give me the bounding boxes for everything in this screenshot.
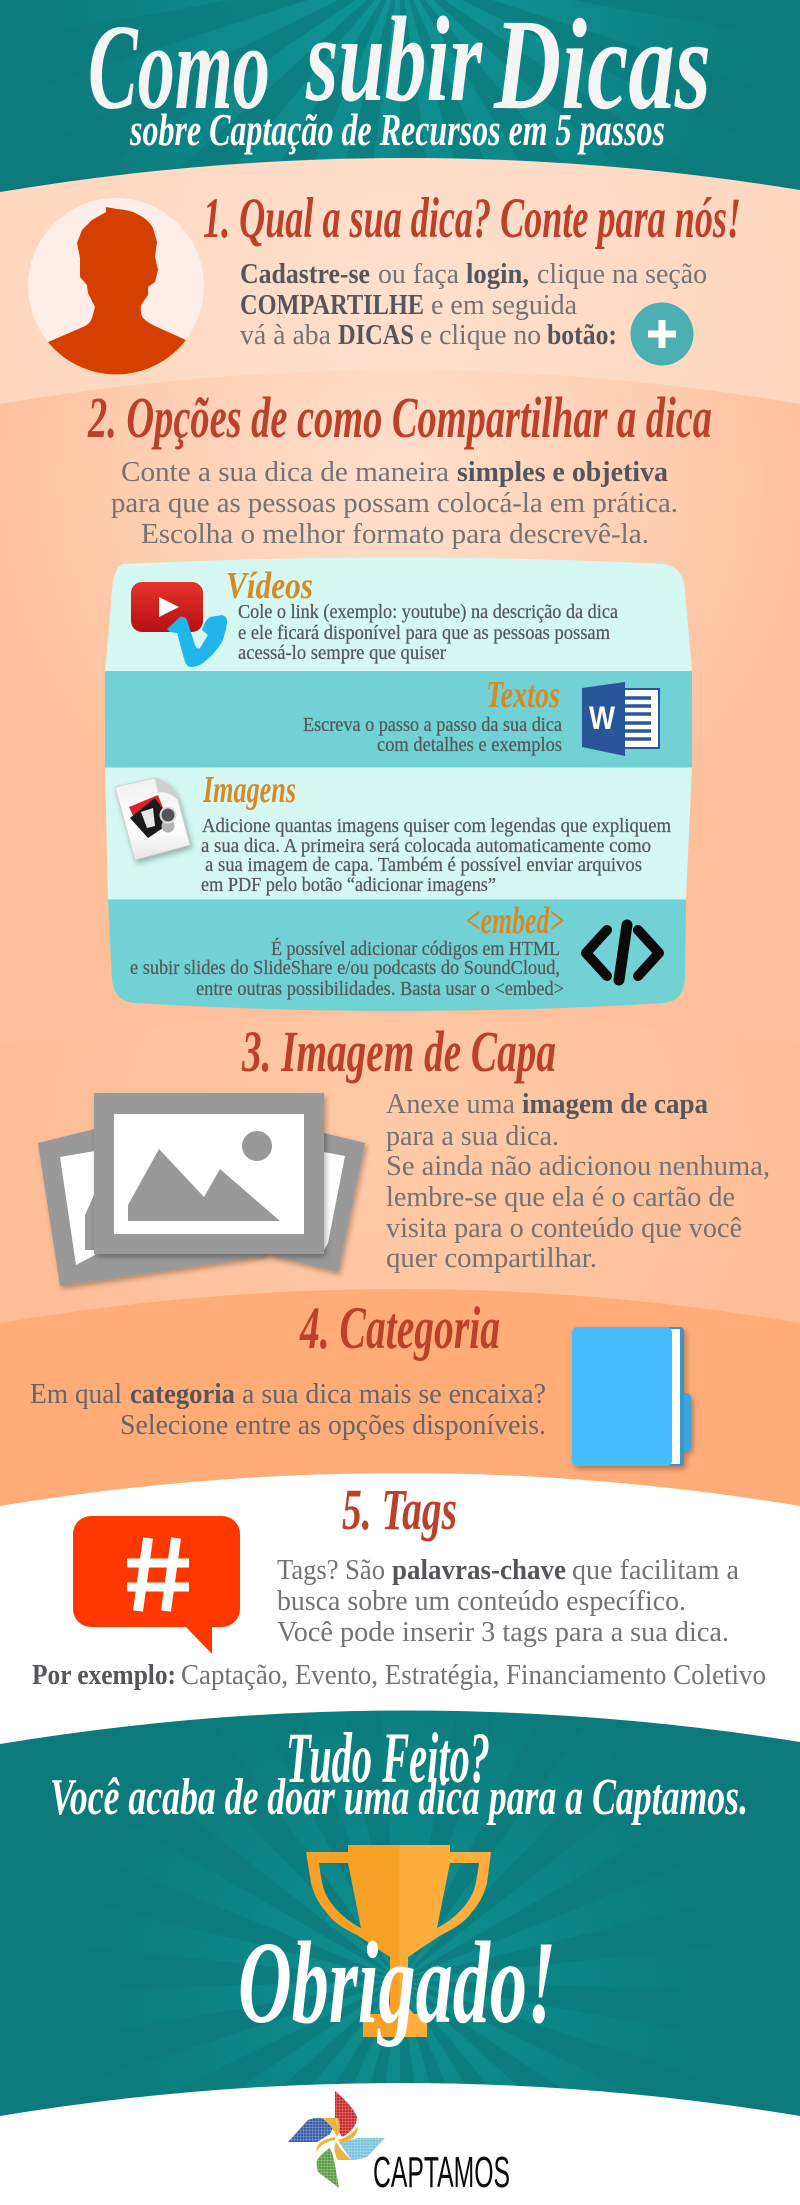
heading: tudo feito: Tudo Feito? <box>286 1718 490 1798</box>
panel: step 1 <box>0 158 800 420</box>
text block: step 4: Selecione entre as opções disponíveis. <box>120 1410 546 1441</box>
panel: format options card <box>100 550 700 1020</box>
icon: person avatar <box>28 198 204 374</box>
icon: trophy <box>306 1845 491 2037</box>
text block: step 1 instructions: botão: <box>547 320 617 351</box>
icon: word document <box>582 682 659 756</box>
panel: header background with rays <box>0 0 800 300</box>
heading: step 3: 3. Imagem de Capa <box>241 1019 556 1084</box>
icon: plus button <box>630 302 694 366</box>
panel: step 4 <box>0 1289 800 1520</box>
icon: stacked photos <box>38 1093 365 1286</box>
text block: step 4 <box>30 1379 546 1441</box>
icon: word document: W <box>589 700 616 736</box>
row: imagens: a sua imagem de capa. Também é possível enviar arquivos <box>205 855 642 876</box>
icon: youtube and vimeo <box>131 582 227 667</box>
text block: step 3: Se ainda não adicionou nenhuma, <box>386 1151 770 1182</box>
panel: step 2 <box>0 370 800 1060</box>
text block: step 4: Em qual <box>30 1379 122 1410</box>
row: textos: Escreva o passo a passo da sua dica <box>303 715 562 736</box>
text block: step 1 instructions: COMPARTILHE <box>240 290 424 321</box>
row: textos <box>303 674 562 756</box>
text block: step 3: imagem de capa <box>522 1089 708 1120</box>
text block: step 4: a sua dica mais se encaixa? <box>242 1379 546 1410</box>
heading: step 4: 4. Categoria <box>299 1295 500 1361</box>
text block: step 3: Anexe uma <box>386 1089 516 1120</box>
heading: main title <box>88 0 711 137</box>
text block: step 5: que facilitam a <box>572 1555 740 1586</box>
text block: step 1 instructions: Cadastre-se <box>240 259 370 290</box>
row: videos: Cole o link (exemplo: youtube) na descrição da dica <box>238 602 618 623</box>
text block: step 2 intro: Conte a sua dica de maneira <box>121 457 450 488</box>
row: embed: É possível adicionar códigos em HTML <box>271 938 560 960</box>
icon: image file document <box>115 778 190 860</box>
text block: step 3: visita para o conteúdo que você <box>386 1213 742 1244</box>
icon: hashtag speech bubble <box>73 1516 240 1654</box>
text block: step 1 instructions: e em seguida <box>431 290 578 321</box>
heading: obrigado: Obrigado! <box>238 1917 556 2048</box>
panel: step 5 <box>0 1473 800 1760</box>
text block: step 2 intro: para que as pessoas possam colocá-la em prática. <box>111 488 678 519</box>
text block: step 3 <box>386 1089 770 1274</box>
text block: step 1 instructions: clique na seção <box>537 259 707 290</box>
row: videos: e ele ficará disponível para que as pessoas possam <box>238 623 610 644</box>
text block: step 1 instructions: vá à aba <box>240 320 332 351</box>
text block: step 3: para a sua dica. <box>386 1121 559 1152</box>
text block: step 5: Você pode inserir 3 tags para a sua dica. <box>277 1617 729 1648</box>
text block: step 1 instructions: ou faça <box>378 259 460 290</box>
icon: blue folder <box>572 1327 691 1466</box>
text block: step 1 instructions: DICAS <box>338 320 414 351</box>
icon: pinwheel <box>288 2091 385 2188</box>
row: videos <box>226 565 618 664</box>
text block: step 2 intro: simples e objetiva <box>457 457 668 488</box>
text block: step 5: busca sobre um conteúdo específico. <box>277 1586 686 1617</box>
row: imagens: a sua dica. A primeira será colocada automaticamente como <box>201 836 651 857</box>
heading: step 5: 5. Tags <box>342 1477 457 1542</box>
row: imagens: em PDF pelo botão “adicionar imagens” <box>201 875 496 896</box>
row: embed: <embed> <box>466 900 564 942</box>
row: embed <box>130 900 564 1000</box>
row: videos: acessá-lo sempre que quiser <box>238 643 446 664</box>
row: embed: e subir slides do SlideShare e/ou podcasts do SoundCloud, <box>130 958 560 979</box>
text block: step 2 intro <box>111 457 678 550</box>
text block: step 5: palavras-chave <box>392 1555 566 1586</box>
icon: code brackets <box>586 925 659 980</box>
panel: closing background with rays <box>0 1700 800 2205</box>
text block: step 3: lembre-se que ela é o cartão de <box>386 1182 735 1213</box>
row: embed: entre outras possibilidades. Basta usar o <embed> <box>196 979 564 1000</box>
row: textos: com detalhes e exemplos <box>377 735 562 756</box>
text block: step 1 instructions: login, <box>466 259 529 290</box>
text block: tag examples: Por exemplo: <box>32 1660 176 1691</box>
row: videos: Vídeos <box>226 565 313 607</box>
text block: step 1 instructions <box>240 259 707 351</box>
row: imagens <box>201 769 671 896</box>
text block: step 3: quer compartilhar. <box>386 1243 597 1274</box>
row: imagens: Adicione quantas imagens quiser com legendas que expliquem <box>202 816 671 837</box>
row: textos: Textos <box>486 674 560 716</box>
text block: step 5 <box>277 1555 740 1648</box>
logo: captamos <box>288 2091 510 2197</box>
panel: step 3 <box>0 1013 800 1340</box>
text block: step 2 intro: Escolha o melhor formato para descrevê-la. <box>141 519 649 550</box>
text block: step 1 instructions: e clique no <box>420 320 541 351</box>
heading: main title: Como <box>88 0 270 135</box>
text block: step 4: categoria <box>130 1379 235 1410</box>
text block: step 5: Tags? São <box>277 1555 385 1586</box>
logo wordmark: CAPTAMOS <box>373 2148 510 2197</box>
row: imagens: Imagens <box>202 769 296 811</box>
text block: tag examples: Captação, Evento, Estratégia, Financiamento Coletivo <box>181 1660 766 1691</box>
